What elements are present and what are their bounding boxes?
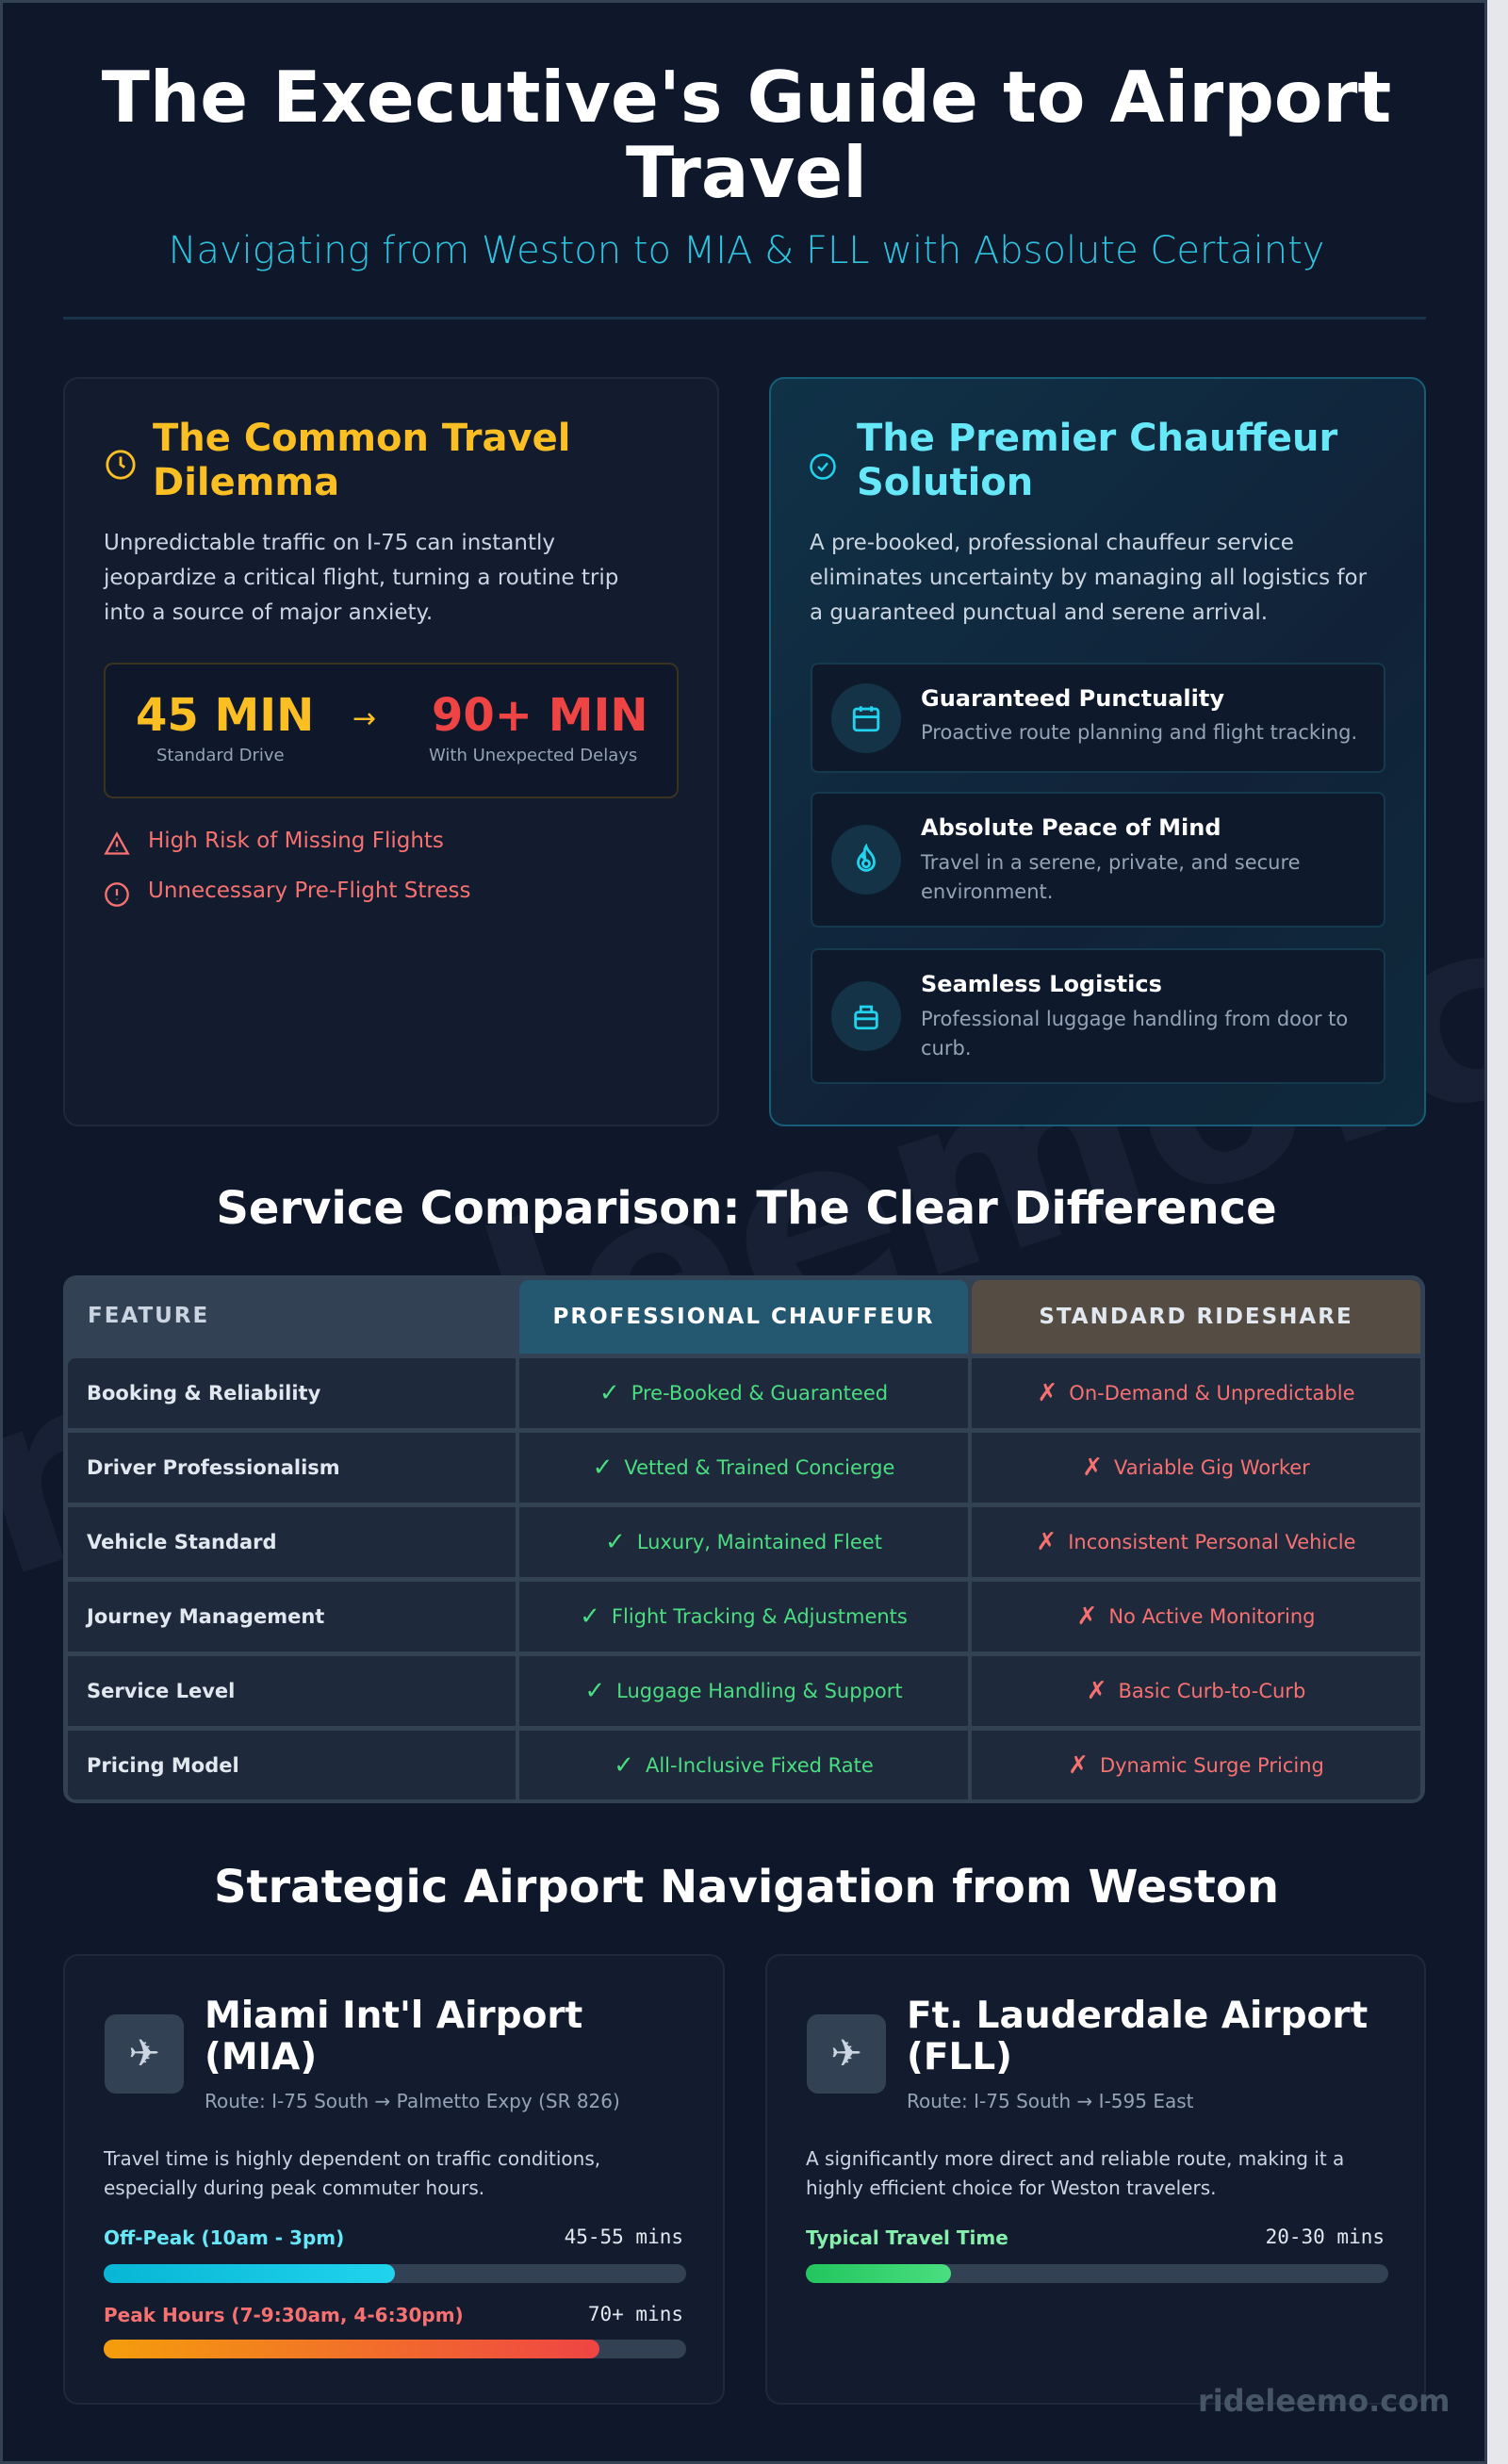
row: service (68, 1656, 516, 1726)
heading: service comparison: Service Comparison: The Clear Difference (216, 1182, 1277, 1235)
feature: punctuality: Proactive route planning and flight tracking. (921, 721, 1357, 744)
header row: FEATURE (88, 1304, 209, 1328)
stats box: With Unexpected Delays (429, 746, 637, 765)
heading: (MIA) (205, 2036, 317, 2078)
text block: especially during peak commuter hours. (104, 2177, 484, 2199)
row: journey (68, 1582, 516, 1651)
icon: plane: ✈ (128, 2032, 160, 2076)
row: driver (68, 1433, 516, 1503)
feature: punctuality: Guaranteed Punctuality (921, 685, 1224, 712)
panel: FLL: 20-30 mins (1266, 2226, 1385, 2248)
comparison table: ✗ (1082, 1454, 1103, 1482)
bar chart: off-peak: Off-Peak (10am - 3pm) (104, 2226, 344, 2249)
feature: peace of mind: Travel in a serene, private, and secure (921, 851, 1301, 874)
panel: MIA: 70+ mins (588, 2303, 683, 2325)
comparison table: Flight Tracking & Adjustments (612, 1605, 908, 1628)
row: pricing: Pricing Model (87, 1753, 239, 1776)
comparison table: Variable Gig Worker (1114, 1456, 1310, 1479)
comparison table: ✗ (1036, 1528, 1057, 1556)
panel: FLL: Route: I-75 South → I-595 East (907, 2090, 1193, 2112)
panel: MIA: Route: I-75 South → Palmetto Expy (SR 826) (205, 2090, 620, 2112)
row: booking (68, 1358, 516, 1428)
text block: A pre-booked, professional chauffeur service (810, 531, 1294, 555)
subtitle: Navigating from Weston to MIA & FLL with Absolute Certainty (169, 229, 1324, 272)
panel: premier chauffeur solution (769, 377, 1426, 1126)
heading: (FLL) (907, 2036, 1012, 2078)
comparison table: ✗ (1037, 1379, 1057, 1407)
text block (810, 531, 1367, 625)
comparison table: ✗ (1068, 1751, 1089, 1780)
stats box: Standard Drive (156, 746, 285, 765)
text block: highly efficient choice for Weston travelers. (806, 2177, 1216, 2199)
text block: jeopardize a critical flight, turning a routine trip (104, 566, 618, 590)
comparison table: STANDARD RIDESHARE (1039, 1305, 1353, 1329)
bar chart: peak: Peak Hours (7-9:30am, 4-6:30pm) (104, 2304, 464, 2326)
comparison table: PROFESSIONAL CHAUFFEUR (553, 1305, 934, 1329)
comparison table: Luxury, Maintained Fleet (637, 1531, 882, 1553)
comparison table: ✓ (599, 1379, 620, 1407)
title: The Executive's Guide to Airport Travel (102, 56, 1391, 214)
comparison table: No Active Monitoring (1108, 1605, 1315, 1628)
stats box (104, 663, 679, 798)
text block (104, 2147, 600, 2199)
comparison table: Pre-Booked & Guaranteed (631, 1382, 888, 1404)
icon: check circle (810, 453, 836, 480)
feature: logistics: Seamless Logistics (921, 971, 1162, 997)
text block: into a source of major anxiety. (104, 600, 433, 625)
feature: peace of mind (811, 792, 1385, 928)
icon: clock (106, 450, 136, 480)
comparison table: All-Inclusive Fixed Rate (646, 1753, 874, 1776)
warning list (104, 829, 470, 907)
feature: logistics (811, 948, 1385, 1084)
heading: Solution (857, 461, 1033, 504)
heading: Dilemma (153, 461, 339, 504)
comparison table: ✓ (584, 1677, 605, 1705)
heading: Ft. Lauderdale Airport (907, 1995, 1368, 2037)
warning list: High Risk of Missing Flights (148, 829, 444, 853)
row: vehicle: Vehicle Standard (87, 1531, 277, 1553)
heading: airport navigation: Strategic Airport Navigation from Weston (214, 1861, 1279, 1914)
stats box: 45 MIN (136, 689, 314, 742)
comparison table: ✗ (1077, 1602, 1097, 1631)
arrow: → (352, 702, 376, 735)
heading (205, 1995, 582, 2078)
comparison table: ✓ (605, 1528, 626, 1556)
feature: punctuality (811, 663, 1385, 773)
feature: peace of mind: environment. (921, 880, 1053, 903)
comparison table: Basic Curb-to-Curb (1118, 1680, 1305, 1702)
comparison table (63, 1275, 1425, 1803)
row: driver: Driver Professionalism (87, 1456, 340, 1479)
text block (806, 2147, 1344, 2199)
comparison table: ✓ (580, 1602, 600, 1631)
comparison table: Inconsistent Personal Vehicle (1068, 1531, 1356, 1553)
comparison table: On-Demand & Unpredictable (1069, 1382, 1355, 1404)
panel: common travel dilemma (63, 377, 719, 1126)
text block: a guaranteed punctual and serene arrival. (810, 600, 1268, 625)
text block: eliminates uncertainty by managing all logistics for (810, 566, 1367, 590)
icon: plane: ✈ (830, 2032, 862, 2076)
text block: A significantly more direct and reliable route, making it a (806, 2147, 1344, 2170)
comparison table: ✓ (614, 1751, 634, 1780)
row: journey: Journey Management (87, 1605, 324, 1628)
icon: plane (105, 2014, 184, 2094)
text block: Travel time is highly dependent on traffic conditions, (104, 2147, 600, 2170)
comparison table: Dynamic Surge Pricing (1100, 1753, 1324, 1776)
icon: plane (807, 2014, 886, 2094)
heading (153, 417, 570, 504)
comparison table: Luggage Handling & Support (616, 1680, 903, 1702)
row: pricing (68, 1731, 516, 1799)
feature: logistics: curb. (921, 1037, 971, 1060)
bar chart: typical: Typical Travel Time (806, 2226, 1008, 2249)
feature: peace of mind: Absolute Peace of Mind (921, 814, 1221, 841)
watermark text: rideleemo.com (1198, 2383, 1451, 2419)
heading: Miami Int'l Airport (205, 1995, 582, 2037)
stats box: 90+ MIN (432, 689, 648, 742)
panel: MIA (63, 1954, 725, 2405)
heading (857, 417, 1338, 504)
comparison table: Vetted & Trained Concierge (624, 1456, 894, 1479)
text block: Unpredictable traffic on I-75 can instantly (104, 531, 555, 555)
feature: logistics: Professional luggage handling from door to (921, 1008, 1348, 1030)
row: booking: Booking & Reliability (87, 1382, 320, 1404)
panel: FLL (765, 1954, 1426, 2405)
row: service: Service Level (87, 1680, 235, 1702)
text block (104, 531, 618, 625)
row: vehicle (68, 1507, 516, 1577)
panel: MIA: 45-55 mins (565, 2226, 683, 2248)
comparison table: ✗ (1087, 1677, 1106, 1705)
heading: The Common Travel (153, 417, 570, 460)
heading (907, 1995, 1368, 2078)
warning list: Unnecessary Pre-Flight Stress (148, 879, 470, 903)
comparison table: ✓ (593, 1454, 613, 1482)
heading: The Premier Chauffeur (857, 417, 1337, 460)
